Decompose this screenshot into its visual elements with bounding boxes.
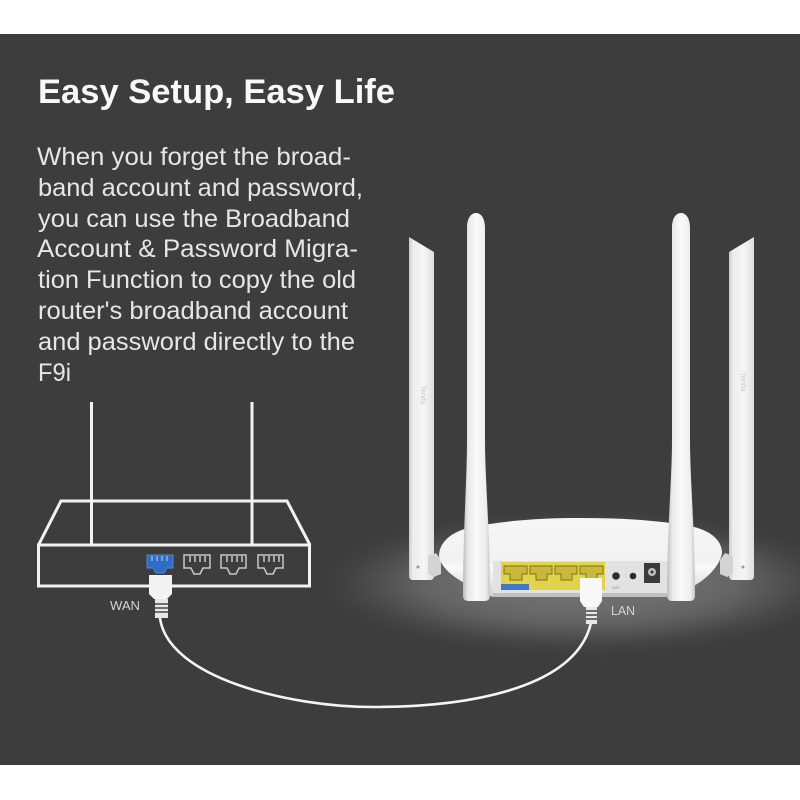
- left outer antenna: [409, 237, 434, 580]
- old router line drawing: [38, 402, 310, 586]
- yellow port block: [501, 562, 605, 590]
- LAN label: LAN: [611, 603, 635, 618]
- right outer antenna: [729, 237, 754, 580]
- body text: band account and password,: [38, 174, 363, 202]
- wifi button: [612, 572, 620, 580]
- body text: Account & Password Migra-: [37, 235, 358, 263]
- antenna hinges: [428, 553, 733, 577]
- body text: F9i: [38, 359, 71, 387]
- right outer antenna: Tenda: [739, 372, 746, 392]
- old router WAN port (blue): [147, 555, 173, 573]
- body text: you can use the Broadband: [38, 205, 350, 233]
- WAN label: WAN: [110, 599, 140, 613]
- reset button: [630, 573, 636, 579]
- old router antennas: [92, 402, 252, 545]
- router body: [439, 518, 722, 597]
- LAN plug: [580, 578, 602, 624]
- body text: tion Function to copy the old: [38, 266, 356, 294]
- body text: When you forget the broad-: [37, 143, 351, 171]
- router rear panel: [493, 561, 668, 597]
- new router group: [409, 213, 754, 601]
- power socket: [644, 563, 660, 583]
- body text: and password directly to the: [38, 328, 355, 356]
- left outer antenna: Tenda: [419, 385, 426, 405]
- blue WAN strip: [501, 584, 529, 590]
- old router front face: [38, 545, 310, 586]
- router base rim: [493, 593, 668, 597]
- body text: router's broadband account: [38, 297, 348, 325]
- network cable: [160, 618, 591, 707]
- floor glow under router: [320, 515, 800, 651]
- old router top outline: [38, 501, 310, 545]
- title: Easy Setup, Easy Life: [38, 73, 395, 111]
- port captions: WiFi: [612, 586, 620, 590]
- body text: [37, 143, 363, 387]
- port sockets: [504, 566, 603, 580]
- WAN plug: [149, 575, 172, 618]
- right inner antenna: [667, 213, 695, 601]
- old router LAN ports: [184, 555, 283, 574]
- left inner antenna: [463, 213, 490, 601]
